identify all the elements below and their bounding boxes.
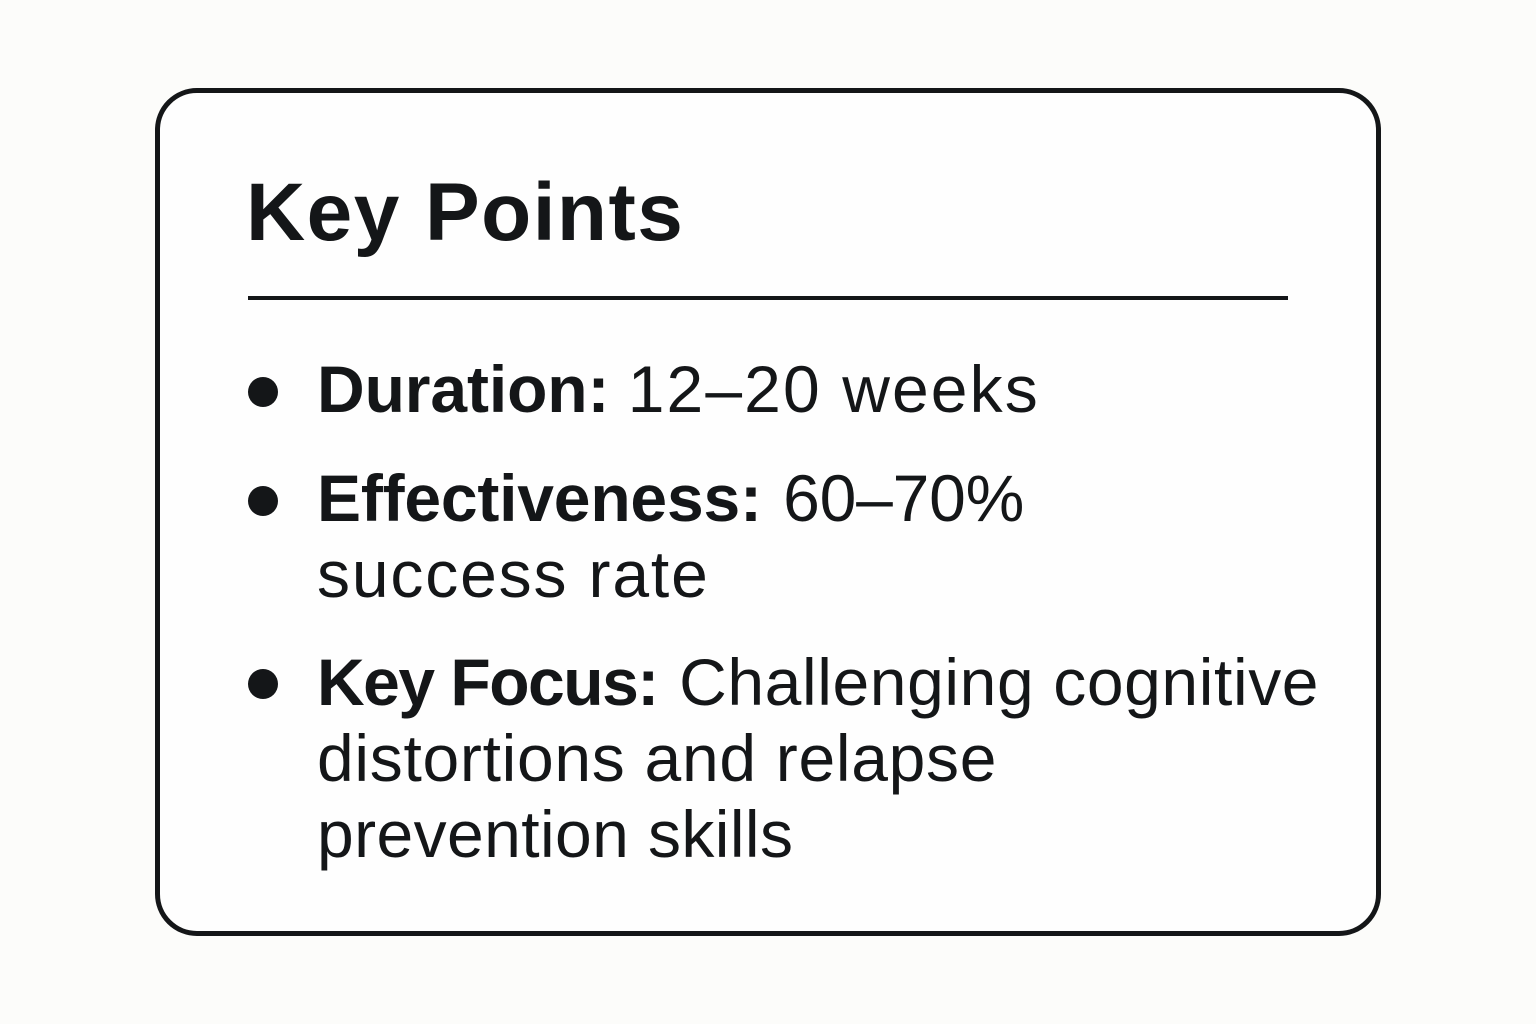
text: effectiveness: success rate bbox=[317, 537, 710, 611]
text: key focus: prevention skills bbox=[317, 797, 793, 871]
text: effectiveness: Effectiveness: 60–70% bbox=[317, 461, 1024, 535]
panel: key points card bbox=[155, 88, 1381, 936]
heading: Key Points: Key Points bbox=[246, 167, 684, 258]
text: key focus: distortions and relapse bbox=[317, 721, 997, 795]
text: key focus bbox=[317, 645, 1319, 871]
text: effectiveness bbox=[317, 461, 1024, 611]
bullet icon: duration bbox=[248, 377, 278, 407]
bullet icon: key focus bbox=[248, 669, 278, 699]
text: duration: Duration: 12–20 weeks bbox=[317, 352, 1040, 426]
text: key focus: Key Focus: Challenging cognitive bbox=[317, 645, 1319, 719]
bullet icon: effectiveness bbox=[248, 486, 278, 516]
divider line under heading bbox=[248, 296, 1288, 300]
